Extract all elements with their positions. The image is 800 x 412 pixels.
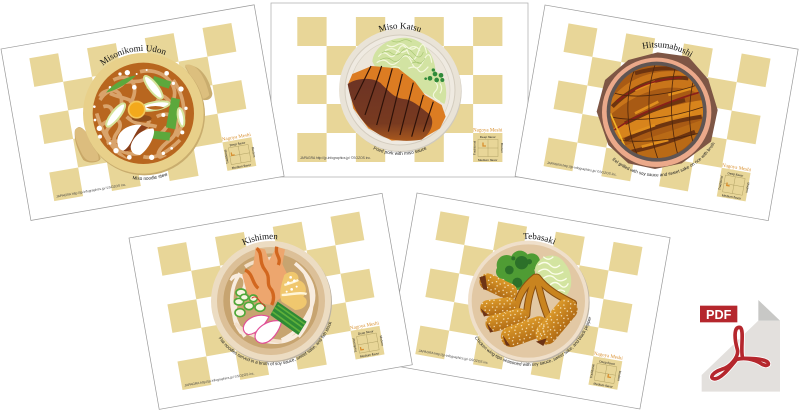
broth foam dots	[93, 69, 188, 160]
taste matrix: Deep flavor	[480, 135, 496, 139]
flat noodles	[230, 258, 314, 342]
greens	[270, 302, 307, 335]
taste matrix: Medium flavor	[232, 163, 251, 170]
green onion rings	[234, 289, 265, 317]
page fold	[758, 300, 780, 321]
card: Tebasaki	[400, 192, 670, 410]
taste matrix: Deep flavor	[358, 329, 374, 336]
caption: Eel grilled with soy sauce and sweet sake on rice with broth	[612, 142, 715, 176]
food: kishimen bowl	[211, 234, 332, 366]
taste matrix: Traditional	[223, 149, 230, 164]
fish cake	[117, 125, 154, 155]
pot handles	[75, 64, 212, 162]
fried tofu	[280, 272, 307, 310]
page	[700, 300, 780, 392]
pork cutlet	[348, 66, 446, 141]
taste matrix: Deep flavor	[599, 359, 615, 366]
taste matrix: Medium flavor	[722, 193, 741, 201]
caption: Fried pork with miso sauce	[373, 146, 426, 155]
credit line: JAPAGRA http://jp-infographics.jp/ ©SOZOS inc.	[547, 161, 617, 177]
title: Kishimen	[242, 234, 278, 246]
broccoli	[496, 251, 540, 290]
taste matrix: Medium flavor	[593, 382, 613, 389]
taste matrix	[221, 133, 258, 171]
taste matrix	[349, 321, 386, 360]
caption: Chicken wing-tips seasoned with soy sauce, sweet sake, and black pepper	[475, 316, 591, 366]
cabbage	[372, 38, 446, 104]
card: Misonikomi Udon	[0, 4, 284, 221]
taste matrix	[588, 352, 625, 390]
card: Miso Katsu	[270, 2, 528, 178]
wing tips	[516, 277, 573, 320]
taste matrix: Modern	[379, 335, 385, 346]
card: Kishimen	[128, 193, 413, 410]
chicken wings	[477, 271, 582, 350]
card sheet	[1, 5, 284, 220]
fish cake	[243, 315, 282, 343]
taste matrix: Nagoya Meshi	[350, 321, 380, 331]
taste matrix: Traditional	[351, 338, 358, 353]
green garnish	[424, 68, 444, 82]
green onion	[106, 75, 180, 141]
caption: Flat noodles served in a broth of soy sauce, sweet sake, and fish stock	[218, 322, 332, 366]
cabbage	[535, 255, 571, 297]
taste matrix: Traditional	[717, 175, 724, 190]
taste matrix: Traditional	[589, 363, 595, 379]
Acrobat logo	[712, 327, 768, 379]
taste matrix: Nagoya Meshi	[473, 128, 503, 134]
taste matrix: Modern	[616, 370, 622, 382]
food: miso katsu plate	[339, 22, 462, 155]
grilled eel	[608, 63, 705, 160]
food: hitsumabushi bowl	[596, 42, 718, 176]
taste matrix: Modern	[745, 182, 751, 193]
credit line: JAPAGRA http://jp-infographics.jp/ ©SOZOS inc.	[300, 156, 371, 160]
title: Misonikomi Udon	[100, 45, 166, 66]
PDF label: PDF	[706, 308, 732, 322]
noodles	[97, 71, 184, 160]
taste matrix: Nagoya Meshi	[222, 133, 252, 143]
taste matrix: Nagoya Meshi	[593, 352, 624, 362]
title: Hitsumabushi	[642, 42, 693, 58]
caption: Miso noodle stew	[132, 173, 168, 180]
food: tebasaki plate	[468, 232, 591, 366]
taste matrix: Deep flavor	[727, 171, 744, 178]
egg yolk	[128, 101, 152, 122]
title: Tebasaki	[523, 232, 556, 244]
card sheet	[515, 5, 798, 221]
credit line: JAPAGRA http://jp-infographics.jp/ ©SOZOS inc.	[56, 183, 126, 199]
taste matrix: Modern	[251, 147, 256, 158]
icon: PDF document	[700, 300, 780, 392]
taste matrix: Medium flavor	[360, 351, 380, 359]
credit line: JAPAGRA http://jp-infographics.jp/ ©SOZOS inc.	[418, 349, 489, 365]
taste matrix: Deep flavor	[229, 141, 246, 147]
taste matrix: Medium flavor	[478, 158, 497, 162]
taste matrix	[472, 128, 504, 162]
fried shrimp	[242, 247, 290, 305]
card sheet	[271, 3, 528, 177]
taste matrix: Nagoya Meshi	[722, 163, 752, 173]
taste matrix	[716, 163, 753, 202]
wooden tray	[597, 52, 718, 169]
taste matrix: Traditional	[472, 141, 476, 155]
title: Miso Katsu	[378, 22, 421, 32]
card sheet	[129, 193, 412, 409]
credit line: JAPAGRA http://jp-infographics.jp/ ©SOZOS inc.	[184, 371, 255, 388]
scallion rings	[103, 74, 186, 129]
food: misonikomi pot	[74, 45, 212, 180]
card sheet	[387, 193, 670, 409]
taste matrix: Modern	[500, 143, 504, 154]
card: Hitsumabushi	[514, 4, 798, 221]
